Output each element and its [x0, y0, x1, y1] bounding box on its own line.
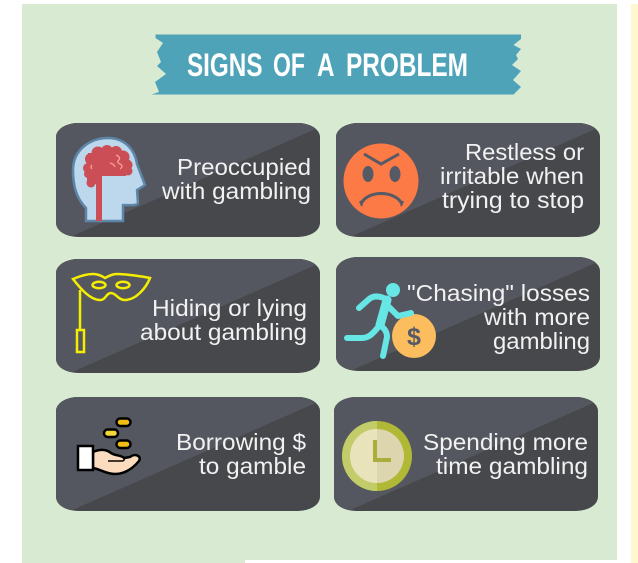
text: spending more time: Spending more	[423, 429, 588, 455]
text: hiding or lying	[140, 295, 307, 345]
icon: clock	[342, 421, 412, 491]
text: hiding or lying: Hiding or lying	[152, 295, 307, 321]
title: SIGNS	[187, 47, 262, 83]
text: borrowing: Borrowing $	[176, 429, 306, 455]
text: restless or irritable: Restless or	[465, 139, 584, 165]
card: chasing	[336, 257, 600, 371]
text: restless or irritable: trying to stop	[442, 187, 584, 213]
text: preoccupied with gambling	[161, 154, 311, 204]
title: A	[317, 47, 334, 83]
card: spending time	[334, 397, 598, 511]
text: chasing losses: with more	[483, 304, 590, 330]
card: preoccupied	[56, 123, 320, 237]
icon: head with brain	[73, 138, 145, 221]
text: preoccupied with gambling: with gambling	[161, 178, 311, 204]
title	[187, 47, 468, 83]
card: hiding	[56, 259, 320, 373]
icon: hand with coins	[78, 418, 140, 474]
card: borrowing	[56, 397, 320, 511]
icon: coin	[392, 314, 436, 358]
icon: running figure	[347, 283, 411, 356]
text: restless or irritable: irritable when	[440, 163, 584, 189]
icon: mask on stick	[73, 274, 150, 352]
text: spending more time: time gambling	[436, 453, 588, 479]
card: restless	[336, 123, 600, 237]
text: spending more time	[423, 429, 588, 479]
text: restless or irritable	[440, 139, 584, 213]
text: preoccupied with gambling: Preoccupied	[177, 154, 311, 180]
title: PROBLEM	[346, 47, 468, 83]
icon: angry face	[344, 144, 418, 218]
text: borrowing: to gamble	[199, 453, 306, 479]
icon: coin: $	[407, 323, 421, 351]
text: chasing losses	[407, 280, 590, 354]
text: hiding or lying: about gambling	[140, 319, 307, 345]
text: chasing losses: "Chasing" losses	[407, 280, 590, 306]
panel: right yellow strip	[631, 4, 638, 563]
title: OF	[273, 47, 305, 83]
title banner	[152, 34, 521, 94]
text: borrowing	[176, 429, 306, 479]
text: chasing losses: gambling	[493, 328, 590, 354]
